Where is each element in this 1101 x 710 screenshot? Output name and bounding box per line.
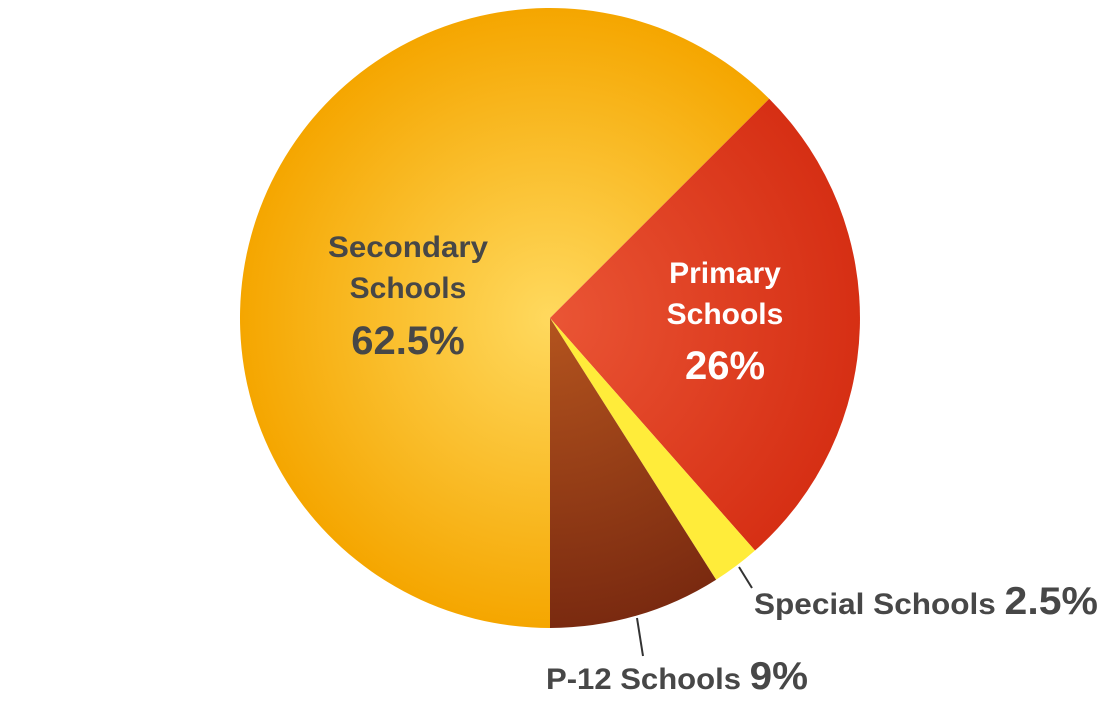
leader line: special bbox=[739, 567, 752, 588]
slice: special schools bbox=[550, 318, 755, 580]
slice: primary schools bbox=[550, 99, 860, 551]
label: special: Special Schools 2.5% bbox=[754, 580, 1098, 623]
label: p-12: P-12 Schools 9% bbox=[546, 655, 808, 698]
slice: p-12 schools bbox=[550, 318, 716, 628]
label: primary: 26% bbox=[685, 344, 765, 388]
label: secondary: 62.5% bbox=[351, 319, 465, 363]
pie chart bbox=[240, 8, 860, 628]
label: primary: Primary bbox=[669, 257, 781, 290]
label: primary bbox=[667, 257, 783, 388]
label: secondary: Schools bbox=[350, 272, 466, 305]
leader line: p-12 bbox=[637, 618, 643, 656]
label: primary: Schools bbox=[667, 298, 783, 331]
label: secondary bbox=[328, 231, 488, 363]
slice: secondary schools bbox=[240, 8, 769, 628]
label: secondary: Secondary bbox=[328, 231, 488, 264]
